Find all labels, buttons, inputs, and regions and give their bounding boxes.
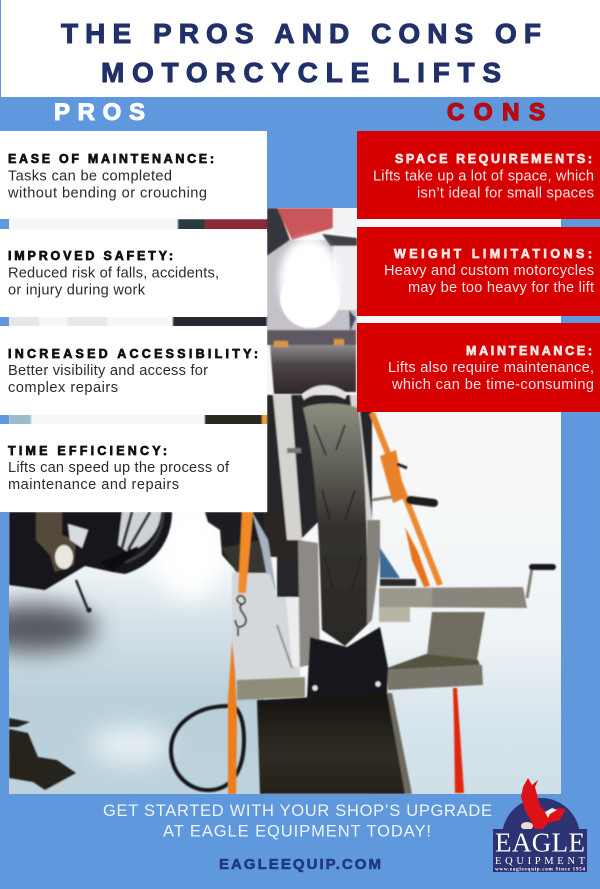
card: space requirements	[357, 131, 600, 219]
boot and dark machinery	[205, 512, 300, 597]
headlight	[279, 238, 340, 328]
lift frame right	[379, 548, 553, 690]
card: space requirements: Lifts take up a lot of space, which	[373, 168, 594, 184]
call to action: GET STARTED WITH YOUR SHOP’S UPGRADE	[103, 802, 492, 820]
card: ease of maintenance: Tasks can be completed	[8, 168, 172, 184]
card: ease of maintenance	[0, 131, 267, 219]
card: time efficiency	[0, 424, 267, 512]
card: maintenance: Lifts also require maintenance,	[388, 360, 594, 376]
card: increased accessibility: INCREASED ACCESSIBILITY:	[8, 347, 258, 361]
card: space requirements: SPACE REQUIREMENTS:	[395, 152, 592, 166]
card: weight limitations: may be too heavy for the lift	[408, 280, 594, 296]
card: ease of maintenance: without bending or crouching	[7, 186, 207, 202]
title band	[1, 0, 600, 97]
card: improved safety: Reduced risk of falls, accidents,	[8, 266, 219, 282]
floor shadow under parked motorcycle	[9, 522, 222, 774]
heading: cons: CONS	[447, 99, 545, 126]
card: ease of maintenance: EASE OF MAINTENANCE:	[8, 152, 214, 166]
dark gaps around wheel	[267, 395, 372, 540]
top edge strips behind left cards	[9, 219, 268, 425]
logo name box: EQUIPMENT	[495, 856, 586, 867]
front tire	[303, 404, 367, 646]
wheel chock	[307, 627, 388, 698]
red strap	[453, 688, 464, 793]
call to action	[103, 802, 492, 840]
right orange straps	[372, 413, 440, 587]
logo dome	[502, 798, 580, 829]
forks	[273, 395, 372, 540]
card: improved safety: or injury during work	[8, 282, 146, 298]
rider shirt and upper bike	[267, 208, 357, 345]
card: increased accessibility: complex repairs	[8, 380, 118, 396]
floor right	[370, 638, 561, 794]
card: improved safety: IMPROVED SAFETY:	[8, 249, 173, 263]
heading: pros: PROS	[54, 99, 145, 126]
card: time efficiency: maintenance and repairs	[8, 477, 179, 493]
icon: red eagle	[521, 778, 566, 832]
logo name box: EAGLE	[495, 828, 585, 858]
website url: EAGLEEQUIP.COM	[219, 856, 381, 873]
fender and fork brace	[270, 339, 356, 400]
parked motorcycle	[9, 512, 172, 613]
card: improved safety	[0, 229, 267, 317]
card: time efficiency: Lifts can speed up the process of	[8, 460, 230, 476]
white gap between right red cards	[357, 219, 561, 227]
floor left	[9, 560, 264, 794]
title line 2: MOTORCYCLE LIFTS	[101, 57, 501, 88]
floor hose	[171, 705, 244, 790]
logo name box	[493, 828, 587, 872]
call to action: AT EAGLE EQUIPMENT TODAY!	[163, 822, 431, 840]
card: increased accessibility: Better visibility and access for	[8, 363, 208, 379]
card: maintenance: MAINTENANCE:	[466, 344, 592, 358]
card: weight limitations: Heavy and custom motorcycles	[384, 263, 594, 279]
card: weight limitations	[357, 227, 600, 316]
lift frame left plate	[232, 520, 380, 700]
card: maintenance: which can be time-consuming	[391, 377, 594, 393]
panel: cons cards	[357, 131, 600, 412]
card: increased accessibility	[0, 326, 267, 415]
panel: pros cards	[0, 131, 267, 512]
lift channel	[257, 693, 408, 794]
card: space requirements: isn’t ideal for small spaces	[417, 186, 594, 202]
oil puddle	[9, 718, 76, 790]
card: weight limitations: WEIGHT LIMITATIONS:	[394, 247, 592, 261]
logo name box: www.eagleequip.com Since 1954	[495, 866, 585, 872]
logo: Eagle Equipment	[493, 778, 587, 876]
title line 1: THE PROS AND CONS OF	[61, 18, 541, 49]
photo: motorcycle on a lift	[0, 208, 561, 794]
card: time efficiency: TIME EFFICIENCY:	[8, 444, 167, 458]
card: maintenance	[357, 323, 600, 412]
left orange strap and hook	[228, 512, 253, 794]
